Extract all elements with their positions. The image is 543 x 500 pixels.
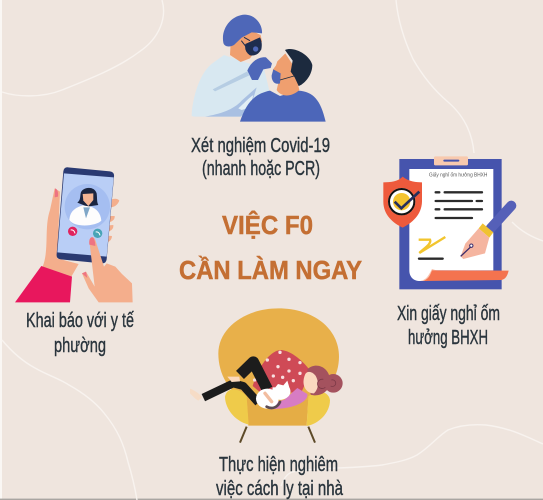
right hand	[82, 237, 133, 302]
paper: Giấy nghỉ ốm hưởng BHXH	[429, 172, 487, 179]
label: home isolation: Thực hiện nghiêm	[219, 454, 338, 476]
illustration: covid test	[192, 15, 326, 122]
label: report to ward medic: Khai báo với y tế	[26, 310, 134, 332]
label: report to ward medic: phường	[54, 335, 106, 357]
clipboard	[399, 156, 502, 289]
doctor	[69, 188, 101, 225]
label: sick leave form: hưởng BHXH	[408, 327, 488, 349]
pen	[461, 206, 511, 259]
title	[179, 210, 362, 285]
foot	[190, 389, 202, 401]
label: home isolation	[216, 454, 344, 500]
label: report to ward medic	[26, 310, 134, 357]
label: covid test: Xét nghiệm Covid-19	[191, 135, 330, 157]
armchair	[218, 308, 339, 443]
illustration: phone call with doctor	[15, 167, 133, 302]
label: covid test: (nhanh hoặc PCR)	[202, 158, 320, 180]
health worker	[192, 15, 272, 117]
label: home isolation: việc cách ly tại nhà	[216, 478, 344, 500]
call buttons	[68, 227, 102, 238]
phone	[57, 167, 114, 263]
label: sick leave form	[397, 303, 500, 349]
illustration: isolation at home	[190, 308, 343, 443]
cat	[256, 381, 290, 409]
woman	[203, 350, 343, 409]
title: VIỆC F0	[222, 210, 313, 240]
patient	[240, 49, 326, 122]
left hand and sleeve	[15, 188, 119, 302]
label: sick leave form: Xin giấy nghỉ ốm	[397, 303, 500, 325]
shield with check mark	[383, 177, 422, 228]
signature	[419, 237, 445, 259]
title: CẦN LÀM NGAY	[179, 255, 362, 285]
label: covid test	[191, 135, 330, 180]
illustration: sick leave form	[383, 156, 511, 289]
